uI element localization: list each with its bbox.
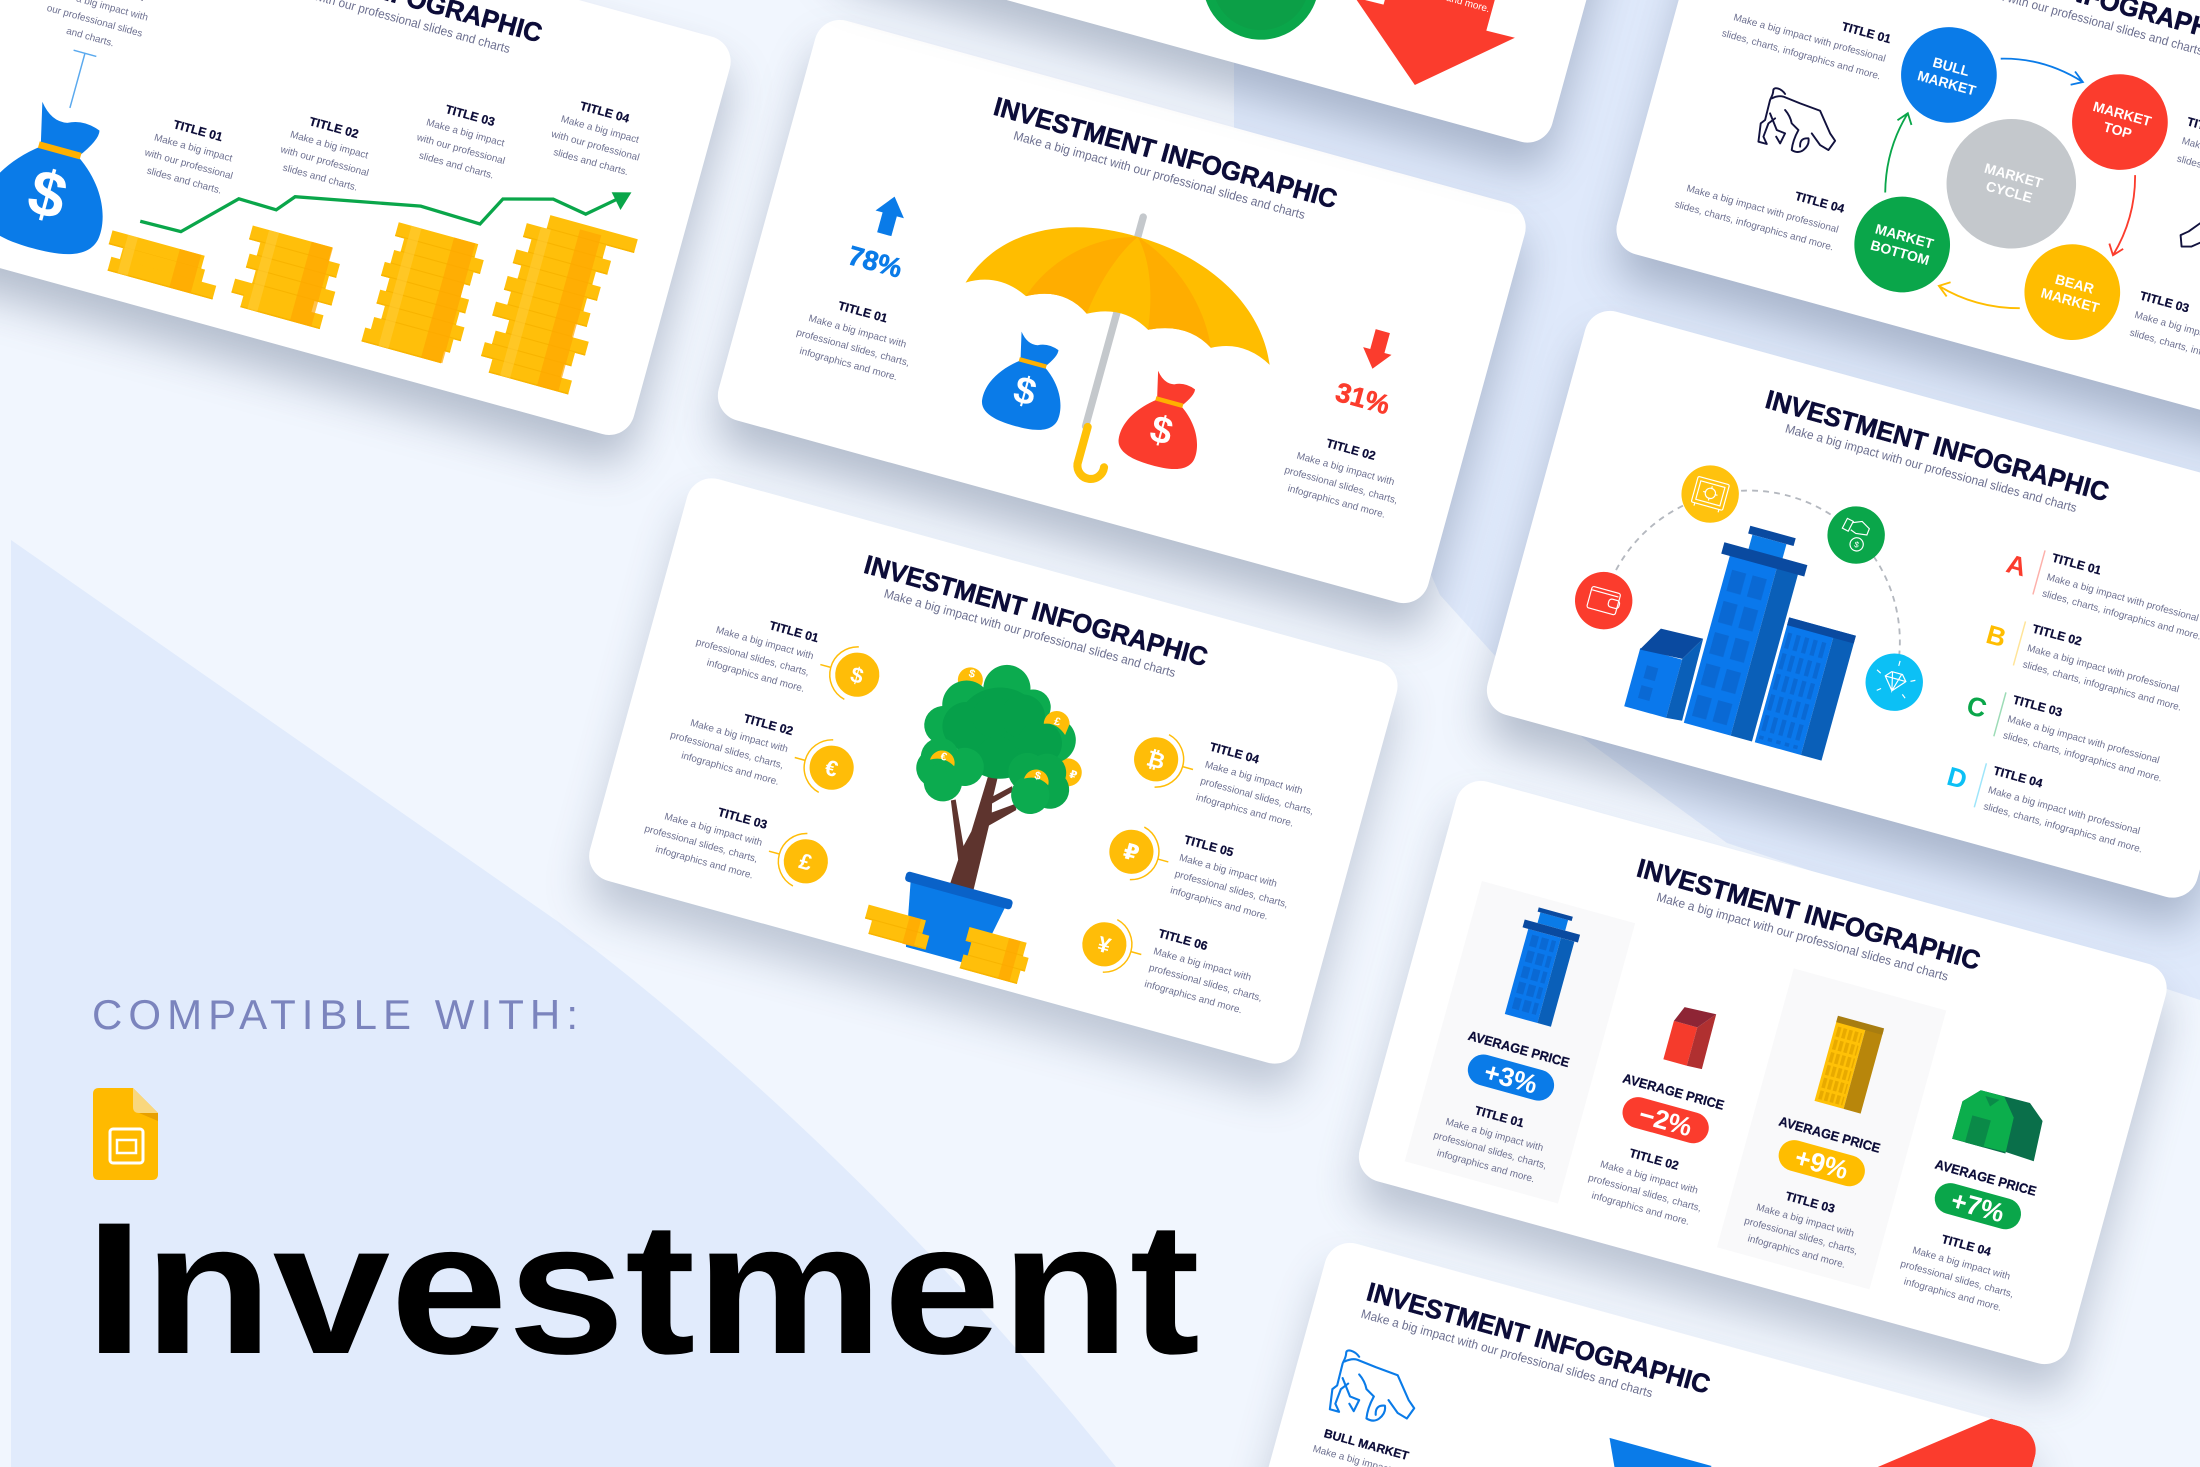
shapes: triangle and red band xyxy=(1610,1418,2036,1467)
text: title 01 xyxy=(791,290,921,385)
text: title 03: infographics and more. xyxy=(654,844,754,882)
illustration: money tree: ¥ xyxy=(966,744,976,757)
text: title 02: Make a big impact with xyxy=(1295,451,1396,488)
text: title 04: TITLE 04 xyxy=(578,99,631,126)
column 2 text: TITLE 02 xyxy=(1628,1146,1681,1173)
text: title 02: professional slides, charts, xyxy=(669,730,785,772)
column 3 text: Make a big impact with xyxy=(1755,1202,1855,1240)
column 3 text: professional slides, charts, xyxy=(1743,1216,1859,1257)
column 2 text: professional slides, charts, xyxy=(1587,1173,1703,1214)
illustration: money tree: € xyxy=(939,751,948,764)
column 3 text: +9% xyxy=(1792,1142,1852,1185)
row D: D xyxy=(1944,761,1970,795)
text: title 06: infographics and more. xyxy=(1143,979,1243,1016)
row B: TITLE 02 xyxy=(2031,622,2084,649)
row C xyxy=(1961,681,2173,785)
text: title 06: Make a big impact with xyxy=(1152,946,1252,984)
text: title 02: infographics and more. xyxy=(1286,483,1387,521)
node: market bottom: BOTTOM xyxy=(1869,237,1931,268)
illustration: right building xyxy=(1755,617,1856,761)
text: title 02: professional slides, charts, xyxy=(1283,465,1399,507)
text: title 01: Make a big impact with xyxy=(807,313,907,351)
text: title 04: infographics and more. xyxy=(1195,792,1295,830)
panel: money tree slide xyxy=(576,472,1408,1098)
row B: slides, charts, infographics and more. xyxy=(2021,659,2183,714)
label: compatible with: COMPATIBLE WITH: xyxy=(92,991,578,1038)
icon: euro coin xyxy=(788,731,860,800)
row B: Make a big impact with professional xyxy=(2026,643,2180,695)
icon: green circle xyxy=(1189,0,1332,53)
text: title 01: infographics and more. xyxy=(798,346,898,383)
panel: coin stacks slide xyxy=(0,0,742,469)
icon: euro coin: € xyxy=(822,755,841,782)
column 4 text: Make a big impact with xyxy=(1911,1245,2011,1283)
icon: bear outline xyxy=(2175,201,2200,276)
stat: 31%: 31% xyxy=(1332,376,1393,420)
icon: up arrow xyxy=(870,193,909,238)
icon: blue tower xyxy=(1499,905,1584,1028)
column 1 text: infographics and more. xyxy=(1436,1148,1536,1185)
text: title 02 xyxy=(2176,114,2200,208)
column 2 text: infographics and more. xyxy=(1590,1190,1691,1228)
illustration: blue pot xyxy=(887,871,1013,971)
text: title 02: Make a big impact with xyxy=(689,718,789,755)
heading: Make a big impact with our professional slides and charts xyxy=(1655,890,1950,984)
text: title 03: professional slides, charts, xyxy=(643,824,759,865)
column 3 text: infographics and more. xyxy=(1746,1233,1847,1271)
icon: bull outline xyxy=(1756,87,1844,161)
icon: yen coin xyxy=(1076,912,1149,981)
node: market cycle: MARKET xyxy=(1983,160,2045,191)
panel: umbrella slide xyxy=(705,14,1537,638)
text: title 02 xyxy=(274,109,380,195)
icon: dollar coin xyxy=(813,638,886,707)
node: bull market xyxy=(1890,16,2008,134)
arrow: red xyxy=(2107,173,2143,257)
column 2 text: AVERAGE PRICE xyxy=(1621,1071,1726,1113)
text: title 06: professional slides, charts, xyxy=(1148,962,1263,1004)
panel: average price slide xyxy=(1346,775,2178,1399)
row D: slides, charts, infographics and more. xyxy=(1982,801,2144,856)
arrow: blue xyxy=(1999,52,2085,88)
column 4 text: +7% xyxy=(1948,1185,2008,1228)
text: title 06 xyxy=(1143,926,1273,1020)
icon: blue money bag xyxy=(978,326,1078,437)
line chart arrow xyxy=(140,69,631,345)
heading: INVESTMENT INFOGRAPHIC xyxy=(1634,853,1984,976)
arrow: yellow xyxy=(1937,280,2022,316)
icon: pound coin xyxy=(762,825,834,893)
icon: safe circle xyxy=(1675,459,1745,529)
text: title 04 xyxy=(545,93,650,180)
text: title 01: TITLE 01 xyxy=(1840,19,1893,46)
dashed arc xyxy=(1603,456,1935,682)
row A: Make a big impact with professional xyxy=(2045,572,2200,624)
text: title 01 xyxy=(690,601,820,695)
icon: yen coin: ¥ xyxy=(1095,931,1114,959)
row D xyxy=(1941,752,2154,856)
text: title 03 xyxy=(410,96,516,183)
column 3 text: TITLE 03 xyxy=(1784,1189,1837,1216)
text: title 04 xyxy=(1195,740,1325,834)
text: title 06: TITLE 06 xyxy=(1157,926,1209,953)
text: title 05 xyxy=(1169,833,1299,927)
row A xyxy=(2000,540,2200,643)
illustration: money tree: ₽ xyxy=(1068,769,1079,782)
node: market cycle: CYCLE xyxy=(1984,178,2034,206)
icon: red money bag: $ xyxy=(1146,407,1177,454)
text: title 02 xyxy=(664,694,795,788)
row D: Make a big impact with professional xyxy=(1987,785,2141,837)
text: title 04: Make a big impact with xyxy=(1204,760,1304,797)
node: market bottom xyxy=(1843,186,1961,303)
column 1 text xyxy=(1428,1026,1576,1187)
node: market top: TOP xyxy=(2102,118,2134,141)
text: title 04 xyxy=(1673,159,1846,253)
text: title 01: TITLE 01 xyxy=(768,618,820,645)
text: title 01: Make a big impact xyxy=(153,132,234,165)
text: title 02: Make a big impact xyxy=(289,129,370,162)
icon: hanging money bag: $ xyxy=(21,154,75,234)
column 3 text: AVERAGE PRICE xyxy=(1777,1114,1882,1156)
text: title 04: professional slides, charts, xyxy=(1199,776,1315,818)
text: title 05: TITLE 05 xyxy=(1183,833,1235,860)
node: bear market: MARKET xyxy=(2039,284,2101,316)
heading: Make a big impact with our professional slides and charts xyxy=(1359,1307,1654,1400)
icon: dollar coin: $ xyxy=(848,662,866,689)
text: title 03: TITLE 03 xyxy=(444,102,497,129)
heading: INVESTMENT INFOGRAPHIC xyxy=(1364,1276,1714,1400)
column 2 text: −2% xyxy=(1636,1099,1695,1142)
column 1 backdrop xyxy=(1405,881,1635,1204)
column 2 text: Make a big impact with xyxy=(1599,1159,1699,1197)
text: title 03: with our professional xyxy=(414,132,506,167)
icon: ruble coin xyxy=(1103,820,1176,888)
node: bull market: MARKET xyxy=(1916,67,1978,99)
text: title 03: slides and charts. xyxy=(418,150,495,182)
illustration: money tree: £ xyxy=(1053,715,1063,729)
text: title 01: with our professional xyxy=(142,147,234,182)
icon: google slides xyxy=(93,1088,158,1180)
title: Investment: Investment xyxy=(85,1183,1200,1393)
coin stack 1 xyxy=(102,230,223,300)
icon: hand money circle xyxy=(1821,500,1891,570)
panel: red arrow slide xyxy=(820,0,1662,177)
row C: Make a big impact with professional xyxy=(2006,714,2161,766)
icon: diamond circle xyxy=(1859,647,1930,718)
row C: slides, charts, infographics and more. xyxy=(2002,730,2163,785)
text: title 02: infographics and more. xyxy=(680,750,780,788)
row A: TITLE 01 xyxy=(2050,551,2103,578)
text: title 01 xyxy=(1720,0,1893,82)
icon: blue bull xyxy=(1327,1349,1424,1431)
heading: INVESTMENT INFOGRAPHIC xyxy=(1762,384,2112,507)
icon: wallet circle xyxy=(1568,565,1639,636)
icon: hand money circle: $ xyxy=(1853,540,1860,550)
icon: red money bag xyxy=(1114,365,1215,476)
text: bull market xyxy=(40,0,155,56)
heading: INVESTMENT INFOGRAPHIC xyxy=(991,91,1341,214)
text: title 03: TITLE 03 xyxy=(2138,288,2191,315)
row A: A xyxy=(2003,548,2030,582)
text: title 02: TITLE 02 xyxy=(742,711,795,738)
coins beside pot xyxy=(859,900,1032,985)
column 4 text: professional slides, charts, xyxy=(1899,1259,2015,1300)
illustration: money tree: $ xyxy=(967,668,976,681)
text: title 01: Make a big impact with professional xyxy=(1732,12,1887,65)
icon: green house xyxy=(1952,1086,2048,1161)
illustration: money tree xyxy=(885,647,1105,910)
text: title 05: infographics and more. xyxy=(1169,885,1269,923)
text: title 03 xyxy=(2128,288,2200,382)
text: title 03 xyxy=(639,787,769,882)
text: title 01: professional slides, charts, xyxy=(795,327,911,369)
text: title 04: with our professional xyxy=(549,129,641,164)
coin stack 4 xyxy=(477,207,638,401)
icon: umbrella xyxy=(924,176,1299,517)
text: title 03: TITLE 03 xyxy=(716,805,769,832)
text: title 04: TITLE 04 xyxy=(1793,189,1846,216)
panel: buildings slide xyxy=(1474,305,2200,932)
text: title 03: Make a big impact with xyxy=(663,811,763,849)
text: bull market: our professional slides xyxy=(45,3,144,40)
column 4 text xyxy=(1895,1155,2043,1316)
panel: market cycle slide xyxy=(1603,0,2200,471)
text: title 01: slides, charts, infographics and more. xyxy=(1720,28,1882,82)
column 4 text: TITLE 04 xyxy=(1940,1232,1993,1259)
illustration: small building xyxy=(1624,623,1705,722)
icon: red building xyxy=(1663,1004,1717,1070)
arrow: green xyxy=(1878,111,1914,194)
column 4 text: infographics and more. xyxy=(1902,1276,2003,1314)
text: title 02: slides and charts. xyxy=(281,163,359,194)
row C: TITLE 03 xyxy=(2011,693,2064,720)
heading: Make a big impact with our professional slides and charts xyxy=(882,587,1177,680)
column 3 text xyxy=(1739,1112,1887,1273)
text: title 01: TITLE 01 xyxy=(837,299,889,326)
column 1 text: +3% xyxy=(1481,1057,1541,1100)
heading: Make a big impact with our professional slides and charts xyxy=(1784,421,2078,515)
icon: bitcoin coin: ₿ xyxy=(1144,745,1168,774)
coin stack 2 xyxy=(228,225,346,330)
text: bull market: BULL MARKET xyxy=(1322,1426,1411,1463)
illustration: tall building xyxy=(1675,520,1813,743)
row D: TITLE 04 xyxy=(1992,764,2044,791)
icon: down arrow xyxy=(1358,327,1397,373)
column 2 text xyxy=(1583,1069,1731,1230)
column 1 text: Make a big impact with xyxy=(1444,1117,1544,1154)
stat: 78%: 78% xyxy=(845,239,906,284)
text: title 01: Make a big impact with xyxy=(715,625,815,662)
node: market top: MARKET xyxy=(2091,98,2154,129)
text: title 02: TITLE 02 xyxy=(308,114,360,141)
coin stack 3 xyxy=(361,221,487,367)
panel: bull and bear slide xyxy=(1215,1237,2047,1467)
icon: ruble coin: ₽ xyxy=(1121,838,1142,866)
column 1 text: professional slides, charts, xyxy=(1432,1130,1548,1172)
text: title 04: Make a big impact xyxy=(560,114,640,146)
row C: C xyxy=(1964,690,1990,724)
row A: slides, charts, infographics and more. xyxy=(2041,588,2200,643)
text: title 01 xyxy=(138,112,244,198)
node: bear market: BEAR xyxy=(2053,271,2096,297)
icon: hanging money bag xyxy=(0,38,145,265)
heading: INVESTMENT INFOGRAPHIC xyxy=(861,549,1211,672)
text: title 05: professional slides, charts, xyxy=(1173,869,1289,910)
text: title 01: infographics and more. xyxy=(706,657,806,695)
column 1 text: TITLE 01 xyxy=(1473,1103,1526,1130)
illustration: money tree: $ xyxy=(1033,770,1042,783)
row B: B xyxy=(1983,619,2009,653)
icon: red down arrow xyxy=(1337,0,1535,107)
icon: blue money bag: $ xyxy=(1009,368,1041,415)
column 4 text: AVERAGE PRICE xyxy=(1933,1157,2038,1199)
icon: bitcoin coin xyxy=(1128,727,1200,796)
text: title 02: TITLE 02 xyxy=(1325,436,1377,463)
row B xyxy=(1980,610,2193,714)
column 1 text: AVERAGE PRICE xyxy=(1466,1028,1571,1070)
column 3 backdrop xyxy=(1717,968,1946,1289)
text: title 04: slides, charts, infographics and more. xyxy=(1673,199,1835,253)
text: title 04: Make a big impact with professional xyxy=(1685,183,1840,236)
text: title 04: slides and charts. xyxy=(552,147,629,178)
heading: Make a big impact with our professional slides and charts xyxy=(1012,128,1307,222)
node: bull market: BULL xyxy=(1931,54,1972,79)
node: market cycle xyxy=(1932,104,2091,263)
node: bear market xyxy=(2013,233,2131,351)
text: bull market: and charts. xyxy=(65,26,115,49)
text: title 01: TITLE 01 xyxy=(172,117,224,144)
node: market top xyxy=(2061,63,2179,181)
text: title 04: TITLE 04 xyxy=(1208,740,1261,767)
text: title 05: Make a big impact with xyxy=(1178,853,1278,890)
text: title 03: Make a big impact xyxy=(425,117,506,149)
node: market bottom: MARKET xyxy=(1874,220,1936,252)
icon: pound coin: £ xyxy=(796,848,816,876)
text: title 02 xyxy=(1279,427,1409,523)
text: title 01: slides and charts. xyxy=(145,166,223,197)
text: title 01: professional slides, charts, xyxy=(695,637,810,679)
icon: yellow tower xyxy=(1814,1016,1884,1114)
text: title 02: with our professional xyxy=(278,144,370,179)
